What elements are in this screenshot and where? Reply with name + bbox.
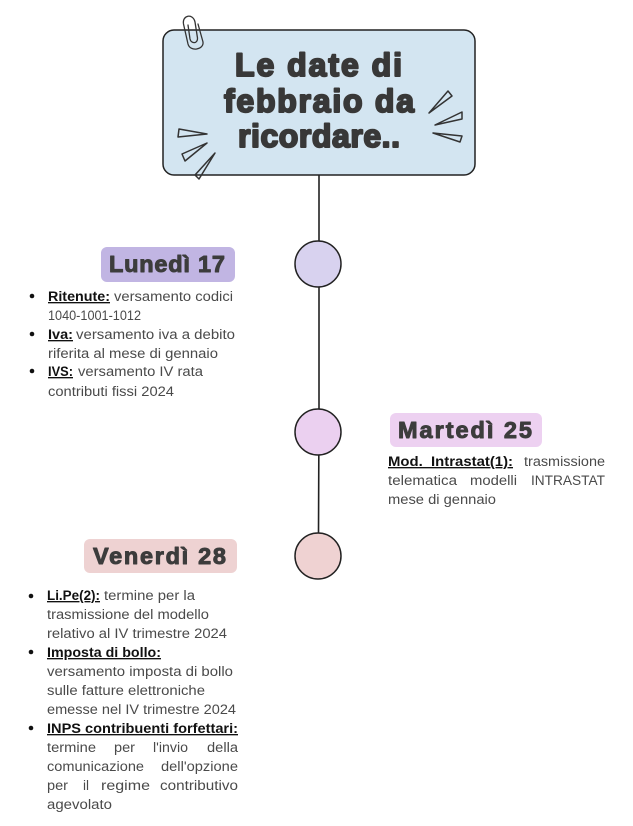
panel: Lunedì 17	[30, 247, 235, 399]
bullet list: versamento imposta di bollo	[47, 664, 233, 679]
bullet list: IVS:	[48, 364, 73, 379]
icon: left sparkles	[178, 129, 215, 179]
bullet list: Li.Pe(2):	[47, 588, 100, 603]
icon: right sparkles	[429, 91, 462, 142]
bullet list: versamento codici	[114, 289, 233, 304]
icon: paperclip	[183, 16, 203, 49]
bullet list: Imposta di bollo:	[47, 645, 161, 660]
bullet list: il	[83, 778, 89, 793]
bullet list: contributi fissi 2024	[48, 384, 175, 399]
description text: modelli	[470, 473, 517, 488]
date label	[101, 247, 235, 282]
bullet list: emesse nel IV trimestre 2024	[47, 702, 237, 717]
panel: Venerdì 28	[29, 539, 239, 812]
description text: INTRASTAT	[531, 473, 605, 488]
date label	[390, 413, 542, 447]
bullet list: comunicazione	[47, 759, 144, 774]
description text: trasmissione	[524, 454, 605, 469]
description text	[388, 454, 605, 507]
bullet list: sulle fatture elettroniche	[47, 683, 205, 698]
bullet list: regime	[101, 778, 150, 793]
timeline node: Lunedì 17	[295, 241, 341, 287]
description text: mese di gennaio	[388, 492, 496, 507]
bullet list: della	[207, 740, 239, 755]
title: febbraio da	[224, 83, 414, 119]
bullet list: relativo al IV trimestre 2024	[47, 626, 228, 641]
timeline node: Venerdì 28	[295, 533, 341, 579]
title: Le date di	[235, 47, 402, 83]
description text: telematica	[388, 473, 458, 488]
bullet list: Ritenute:	[48, 289, 110, 304]
date label: Martedì 25	[398, 417, 532, 443]
bullet list: termine per la	[104, 588, 196, 603]
bullet list: versamento IV rata	[78, 364, 204, 379]
bullet list: per	[114, 740, 136, 755]
title: ricordare..	[238, 118, 400, 154]
bullet list: INPS contribuenti forfettari:	[47, 721, 238, 736]
bullet list: agevolato	[47, 797, 112, 812]
panel: Martedì 25	[388, 413, 605, 507]
bullet list: trasmissione del modello	[47, 607, 209, 622]
timeline line	[318, 175, 320, 533]
bullet list: 1040-1001-1012	[48, 308, 141, 323]
title card	[163, 16, 475, 179]
date label: Venerdì 28	[93, 543, 226, 569]
bullet list: versamento iva a debito	[76, 327, 235, 342]
date label	[84, 539, 237, 573]
bullet list: per	[47, 778, 69, 793]
bullet list	[30, 289, 235, 399]
description text: Mod. Intrastat(1):	[388, 454, 513, 469]
card background	[163, 30, 475, 175]
bullet list: Iva:	[48, 327, 73, 342]
title	[224, 47, 414, 154]
date label: Lunedì 17	[109, 251, 225, 277]
bullet list: riferita al mese di gennaio	[48, 346, 218, 361]
bullet list	[29, 588, 239, 812]
bullet list: termine	[47, 740, 96, 755]
bullet list: l'invio	[153, 740, 188, 755]
bullet list: dell'opzione	[161, 759, 238, 774]
bullet list: contributivo	[160, 778, 238, 793]
timeline node: Martedì 25	[295, 409, 341, 455]
